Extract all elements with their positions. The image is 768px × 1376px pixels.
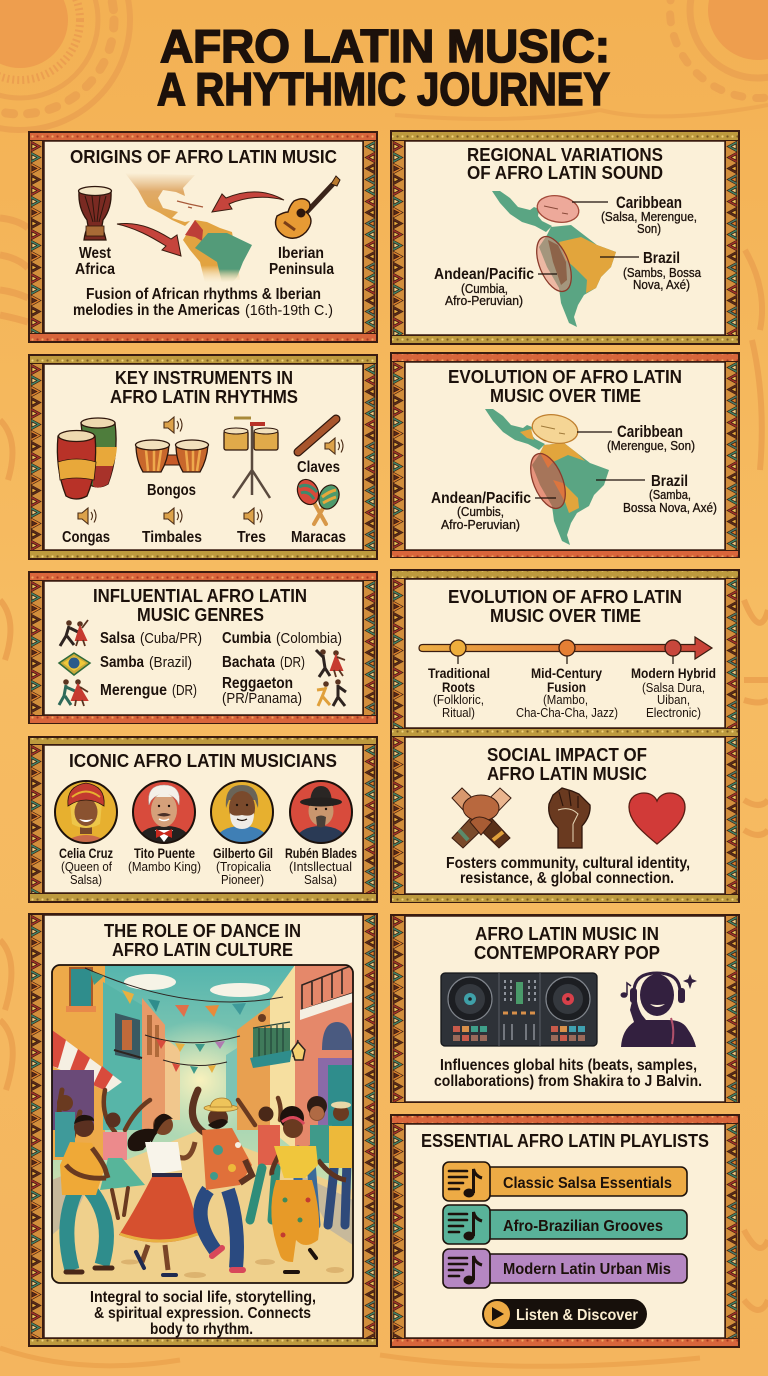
panel: iconic musicians [28,736,378,903]
milestone: mid-century fusion: Cha-Cha-Cha, Jazz) [516,705,618,720]
icon: claves highlight [298,419,336,452]
callout: Caribbean: Caribbean [616,194,682,212]
heading: ICONIC AFRO LATIN MUSICIANS [69,751,337,771]
icon: maracas [293,476,343,524]
portrait: Ruben Blades [290,781,352,845]
icon: speaker claves [325,438,343,454]
heading [448,367,682,406]
portrait: Tito Puente [133,781,195,845]
text: Samba: Samba [100,654,144,671]
label: Bongos: Bongos [147,482,196,499]
panel: evolution timeline [390,569,740,737]
heading: MUSIC GENRES [137,605,264,625]
text: Salsa: (Cuba/PR) [140,631,202,647]
milestone: modern hybrid: Uiban, [657,692,690,707]
arrow: Iberia to Americas [212,192,284,212]
playlist: afro-brazilian: Afro-Brazilian Grooves [503,1218,663,1235]
map: regions [492,191,616,327]
caption: Tito Puente: Tito Puente [134,845,195,861]
callout: Caribbean: (Salsa, Merengue, [601,209,697,224]
caption: Gilberto Gil: (Tropicalia [216,859,272,874]
text: Reggaeton [222,675,302,707]
panel: social impact [390,728,740,903]
callout: Andean/Pacific: Andean/Pacific [431,490,531,507]
heading: AFRO LATIN MUSIC IN [475,924,659,944]
heading [110,368,298,407]
caption: Gilberto Gil: Pioneer) [221,872,264,887]
callout: Andean/Pacific [431,490,556,532]
callout: Andean/Pacific [434,266,557,308]
icon: Brazil flag [59,653,90,675]
icon: DJ controller [441,973,597,1046]
panel: influential genres [28,571,378,724]
title: A RHYTHMIC JOURNEY [157,63,610,115]
text: Cumbia: (Colombia) [276,631,342,647]
heading: ESSENTIAL AFRO LATIN PLAYLISTS [421,1131,709,1151]
icon: merengue dancers [59,679,88,706]
caption: Ruben Blades [285,845,357,887]
milestone: modern hybrid: Electronic) [646,705,701,720]
icon: reggaeton dancers [317,679,346,706]
heading [104,921,301,960]
playlist: modern urban: Modern Latin Urban Mis [503,1261,671,1278]
text: Reggaeton: Reggaeton [222,675,293,692]
panel: role of dance [28,913,378,1347]
heading: AFRO LATIN MUSIC [487,764,647,784]
playlist: classic salsa [443,1162,687,1201]
milestone: traditional roots: Traditional [428,665,490,681]
heading: KEY INSTRUMENTS IN [115,368,293,388]
callout: Brazil [596,473,717,515]
icon: claves [298,419,336,452]
heading: INFLUENTIAL AFRO LATIN [93,586,307,606]
text: dance caption [90,1289,316,1338]
milestone: mid-century fusion: Mid-Century [531,665,602,681]
text: dance caption: & spiritual expression. Connects [94,1305,311,1322]
heading [448,587,682,626]
icon: guitar [276,176,340,238]
callout: Brazil: Brazil [643,250,680,267]
portrait: Celia Cruz [55,781,117,845]
callout: Andean/Pacific: (Cumbis, [457,504,504,519]
text: social impact [446,855,690,887]
heading: EVOLUTION OF AFRO LATIN [448,367,682,387]
icon: speaker bongos [164,417,182,433]
panel: contemporary pop [390,914,740,1103]
text: social impact: Fosters community, cultural identity, [446,855,690,872]
text: Merengue: Merengue [100,682,167,699]
milestone: traditional roots: (Folkloric, [433,692,484,707]
man in floral shirt [192,1090,252,1270]
caption: Celia Cruz: Celia Cruz [59,845,113,861]
heading: REGIONAL VARIATIONS [467,145,663,165]
label: Timbales: Timbales [142,529,202,546]
text: Reggaeton: (PR/Panama) [222,691,302,707]
panel: key instruments [28,354,378,560]
heading: CONTEMPORARY POP [474,943,660,963]
icon: salsa dancers [60,620,88,646]
text: Samba [100,654,192,671]
caption: Gilberto Gil: Gilberto Gil [213,845,273,861]
text: Salsa [100,630,202,647]
button: listen and discover [482,1299,647,1329]
panel: evolution map [390,352,740,558]
text: dance caption: body to rhythm. [150,1321,253,1338]
playlist: classic salsa: Classic Salsa Essentials [503,1175,672,1192]
heading: SOCIAL IMPACT OF [487,745,647,765]
callout: Caribbean: Caribbean [617,423,683,441]
callout: Andean/Pacific: Andean/Pacific [434,266,534,283]
label: Iberian Peninsula [269,245,334,278]
arrow: Africa to Americas [117,223,181,256]
label: Claves: Claves [297,459,340,476]
text: Cumbia: Cumbia [222,630,271,647]
illustration: street dance [52,965,353,1283]
heading: OF AFRO LATIN SOUND [467,163,663,183]
text: pop caption: Influences global hits (beats, samples, [440,1057,697,1074]
milestone: modern hybrid: (Salsa Dura, [642,680,705,695]
text: fusion caption: Fusion of African rhythms & Iberian [86,286,321,303]
playlist: modern urban [443,1249,687,1288]
caption: Celia Cruz: Salsa) [70,872,102,887]
icon: music listener silhouette [620,973,697,1047]
heading [474,924,660,963]
icon: bongos [136,440,208,472]
woman in red skirt [119,1114,198,1275]
button: listen and discover: Listen & Discover [516,1307,638,1324]
icon: raised fist [549,788,590,848]
map: Americas [125,173,252,283]
text: pop caption: collaborations) from Shakira to J Balvin. [434,1073,702,1090]
heading [93,586,307,625]
milestone: mid-century fusion [516,665,618,720]
timeline arrow [419,637,712,664]
label: Tres: Tres [237,529,266,546]
milestone: traditional roots: Roots [442,679,475,695]
heading: THE ROLE OF DANCE IN [104,921,301,941]
text: Samba: (Brazil) [149,655,192,671]
caption: Tito Puente: (Mambo King) [128,859,201,874]
callout: Brazil: (Samba, [649,487,691,502]
label: West Africa: West [79,245,111,262]
text: Merengue: (DR) [172,683,197,699]
heading: MUSIC OVER TIME [490,606,641,626]
playlist: afro-brazilian [443,1205,687,1244]
title [157,20,610,115]
caption: Gilberto Gil [213,845,273,887]
milestone: mid-century fusion: (Mambo, [543,692,588,707]
woman in yellow top [271,1106,346,1272]
text: social impact: resistance, & global connection. [460,870,674,887]
icon: speaker congas [78,508,96,524]
label: Maracas: Maracas [291,529,346,546]
icon: joined hands [452,788,511,848]
caption: Tito Puente [128,845,201,874]
man in yellow shirt [60,1115,112,1272]
callout: Caribbean [577,423,695,453]
milestone: modern hybrid: Modern Hybrid [631,665,716,681]
milestone: traditional roots [428,665,490,720]
heading [467,145,663,183]
text: pop caption [434,1057,702,1090]
heading: AFRO LATIN CULTURE [112,940,293,960]
icon: djembe drum [78,186,112,240]
text: Bachata: (DR) [280,655,305,671]
icon: bachata dancers [316,649,345,677]
text: fusion caption: (16th-19th C.) [245,303,333,319]
icon: heart [629,793,685,844]
label: West Africa [75,245,115,278]
text: dance caption: Integral to social life, storytelling, [90,1289,316,1306]
icon: speaker tres [244,508,262,524]
heading: ORIGINS OF AFRO LATIN MUSIC [70,147,337,167]
milestone: modern hybrid [631,665,716,720]
text: Salsa: Salsa [100,630,135,647]
caption: Ruben Blades: Rubén Blades [285,845,357,861]
callout: Brazil [600,250,702,292]
caption: Ruben Blades: Salsa) [304,872,337,887]
icon: congas [57,418,117,499]
caption: Celia Cruz: (Queen of [61,859,112,874]
callout: Brazil: Bossa Nova, Axé) [623,500,717,515]
label: Iberian Peninsula: Iberian [278,245,324,262]
callout: Andean/Pacific: Afro-Peruvian) [445,293,523,308]
callout: Brazil: (Sambs, Bossa [623,265,702,280]
callout: Brazil: Brazil [651,473,688,490]
portrait: Gilberto Gil [211,781,273,845]
heading: MUSIC OVER TIME [490,386,641,406]
icon: timbales [224,418,278,498]
callout: Caribbean: (Merengue, Son) [607,438,695,453]
caption: Ruben Blades: (Intsllectual [289,859,352,874]
milestone: traditional roots: Ritual) [442,705,475,720]
callout: Andean/Pacific: (Cumbia, [461,281,508,296]
heading: EVOLUTION OF AFRO LATIN [448,587,682,607]
title: AFRO LATIN MUSIC: [160,20,610,72]
text: Cumbia [222,630,342,647]
panel: regional variations [390,130,740,345]
caption: Celia Cruz [59,845,113,887]
heading: AFRO LATIN RHYTHMS [110,387,298,407]
text: Bachata: Bachata [222,654,275,671]
icon: speaker timbales [164,508,182,524]
callout: Caribbean: Son) [637,221,661,236]
heading [487,745,647,784]
text: fusion caption: melodies in the Americas [73,302,240,319]
label: Iberian Peninsula: Peninsula [269,261,334,278]
panel: origins of Afro Latin music [28,131,378,343]
map: regions [485,409,609,545]
callout: Caribbean [572,194,697,236]
label: West Africa: Africa [75,261,115,278]
label: Congas: Congas [62,529,110,546]
panel: essential playlists [390,1114,740,1348]
milestone: mid-century fusion: Fusion [547,679,586,695]
text: fusion caption [73,286,333,319]
callout: Andean/Pacific: Afro-Peruvian) [441,517,520,532]
callout: Brazil: Nova, Axé) [633,277,690,292]
